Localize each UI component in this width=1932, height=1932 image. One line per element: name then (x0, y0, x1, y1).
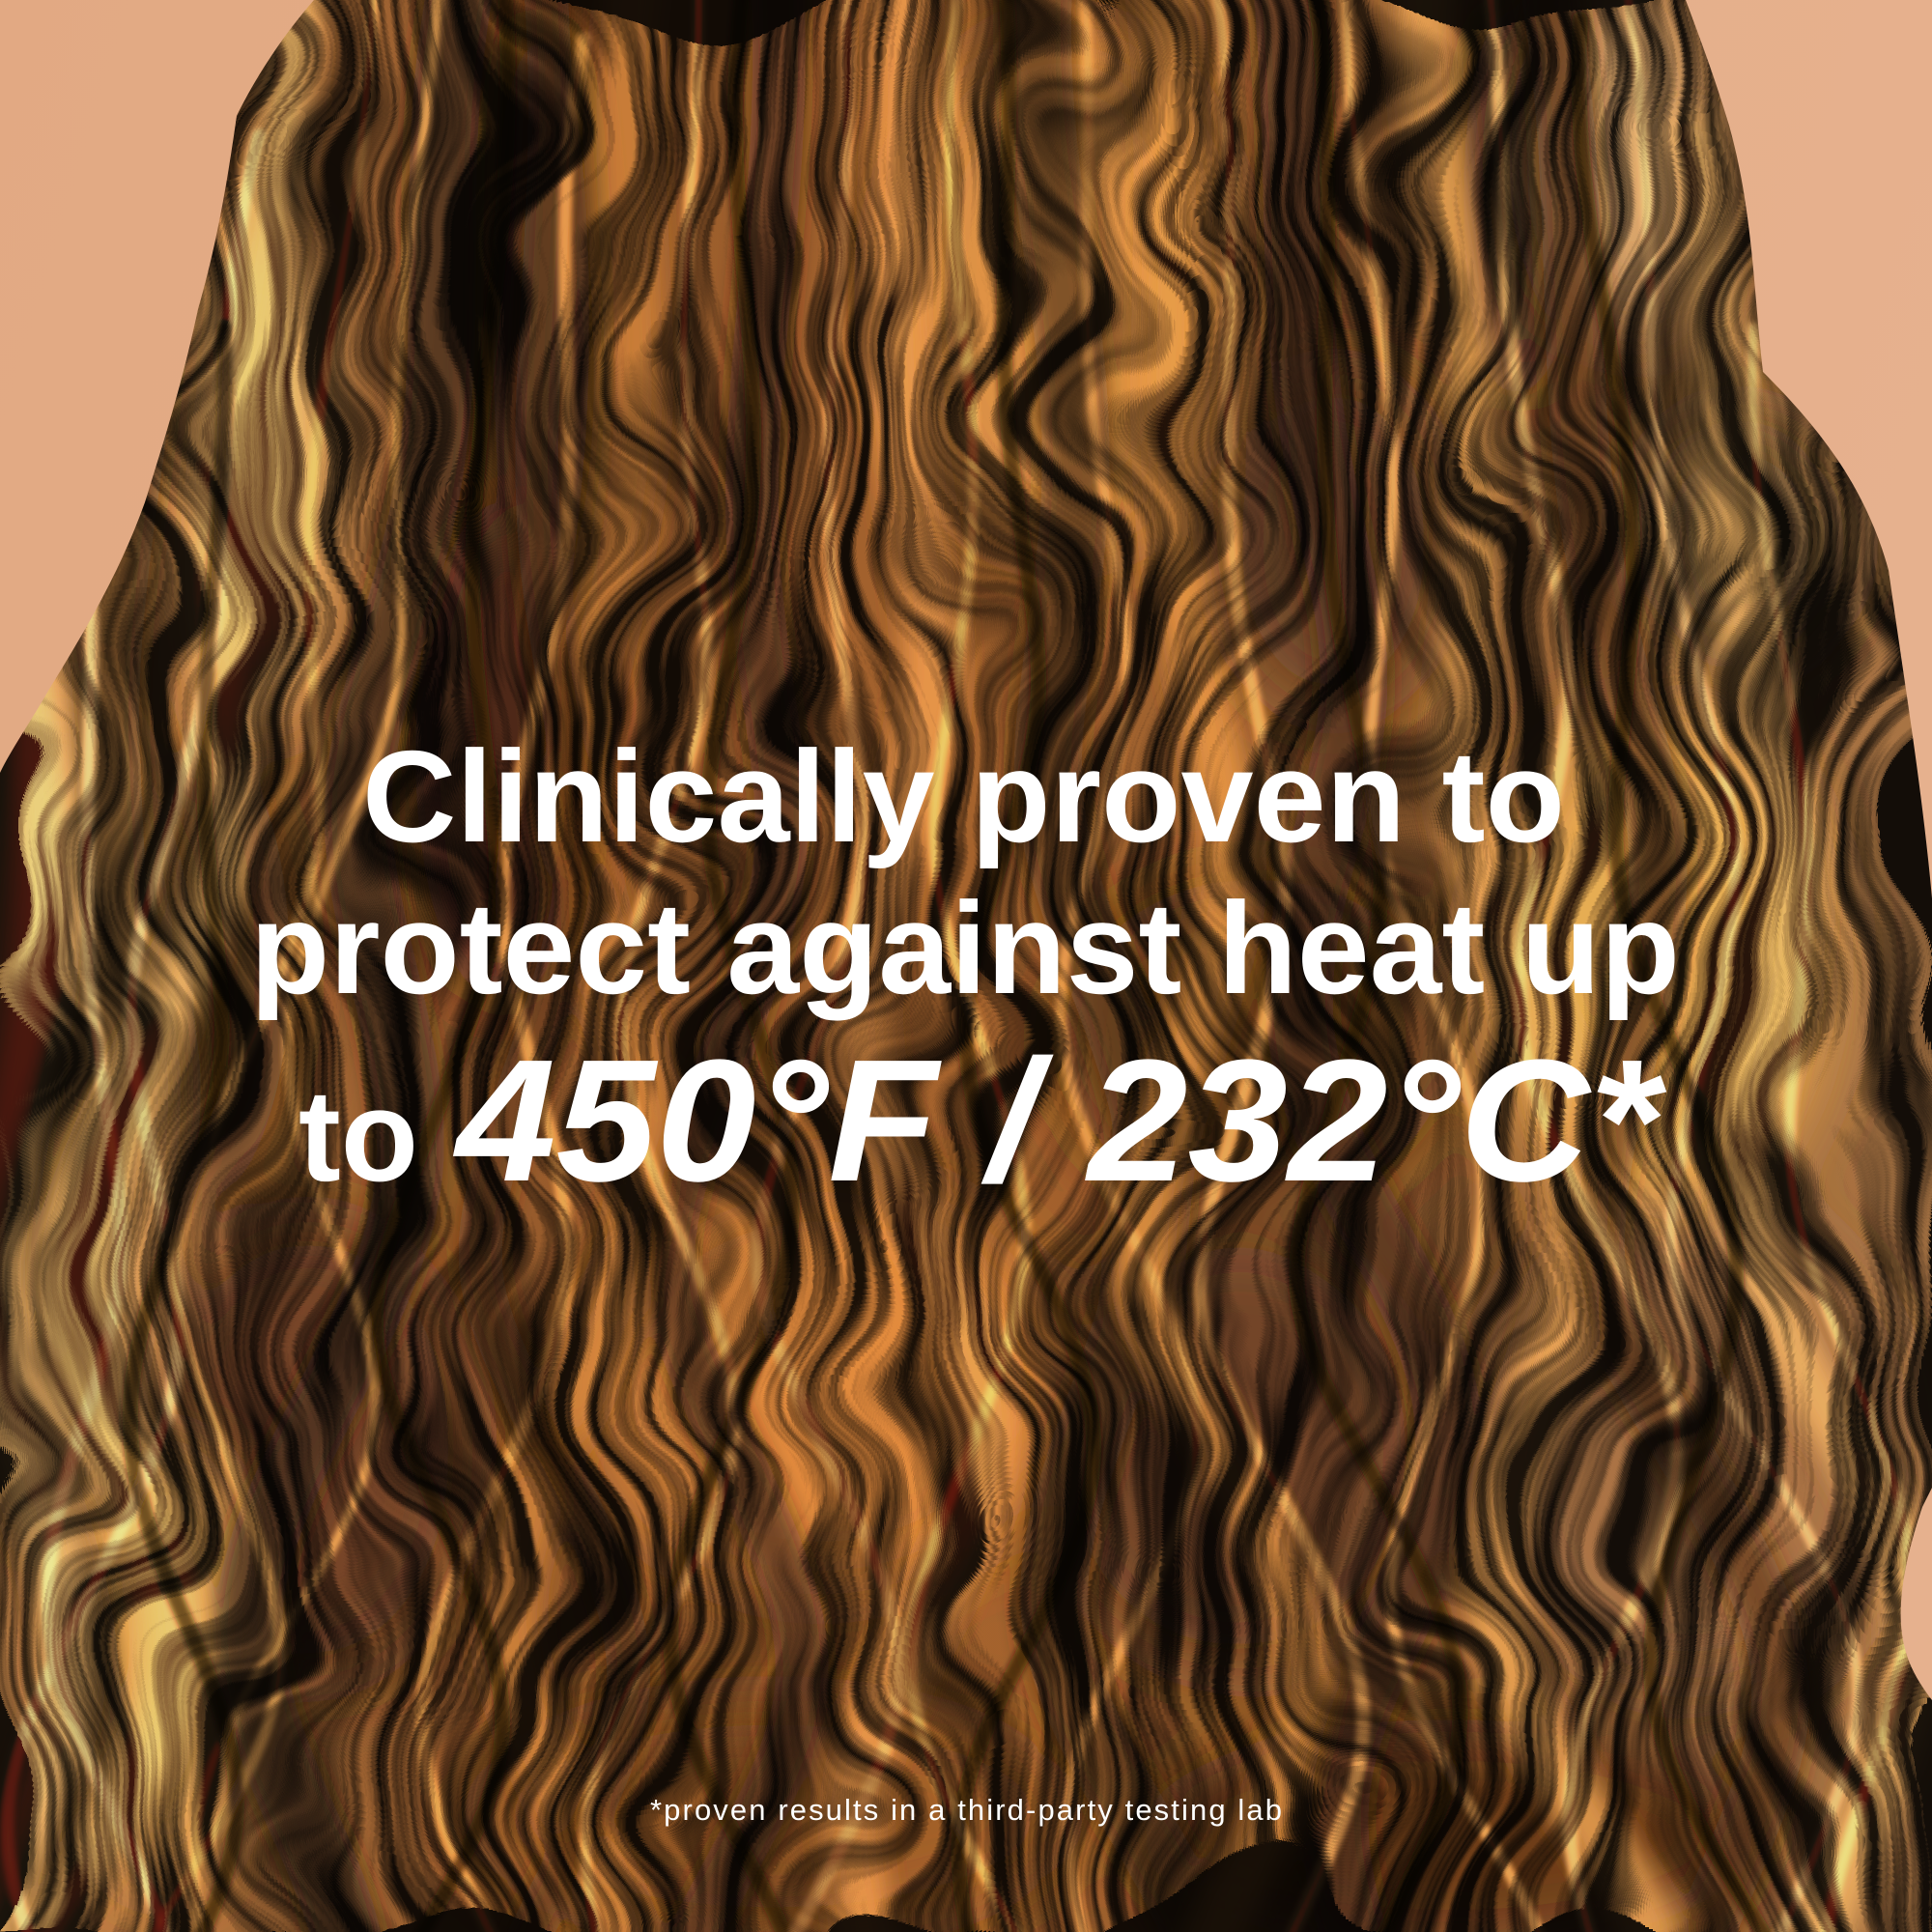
headline line 3 lead-in: to (298, 1063, 418, 1208)
headline line 2: protect against heat up (250, 875, 1680, 1021)
footnote: *proven results in a third-party testing lab (650, 1793, 1282, 1827)
headline line 1: Clinically proven to (362, 724, 1565, 869)
temperature callout: 450°F / 232°C* (453, 1024, 1667, 1218)
headline (250, 724, 1680, 1218)
